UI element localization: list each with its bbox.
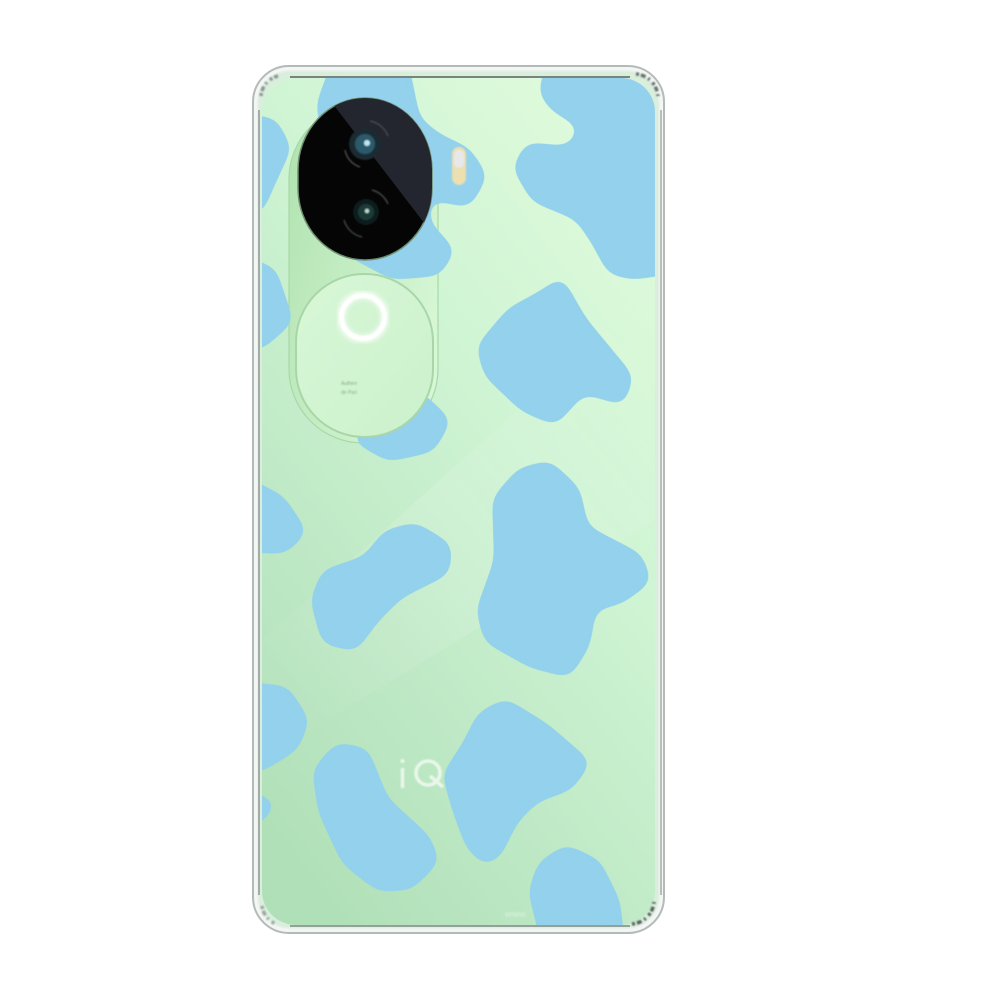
corner reinforcement speckles [261,74,658,924]
glowing ring light [341,295,385,339]
blob: top right [515,78,655,279]
blob: middle left [310,522,452,652]
camera module [298,95,440,260]
green phone back [262,78,655,925]
blob: large right [476,460,652,678]
flash pill module [296,274,433,437]
pill small print [341,381,357,396]
pill small print: Authen [341,381,357,387]
blob: under flash pill [357,398,448,460]
transparent case frame [253,66,664,933]
iQ logo [401,760,443,788]
blob: bottom centre [442,698,592,866]
cow-print blue blobs [262,78,655,925]
pill small print: de Pari [341,390,357,396]
blob: left edge 5 [262,796,272,820]
phone case illustration [252,65,665,934]
blob: left edge 1 [230,112,292,214]
blob: centre right [476,276,634,426]
light streak on back [262,300,655,760]
lower lens [344,190,388,237]
blob: around camera [317,78,484,280]
upper lens [345,121,388,167]
flash strip [452,147,466,185]
bottom watermark text: www [504,909,527,919]
blob: left edge 4 [262,683,307,770]
blob: left edge 2 [262,262,291,348]
reflective diagonal [334,98,432,222]
blob: bottom left [312,742,440,892]
capsule camera housing [289,105,438,443]
blob: left edge 3 [262,484,304,554]
blob: bottom right [530,847,623,925]
